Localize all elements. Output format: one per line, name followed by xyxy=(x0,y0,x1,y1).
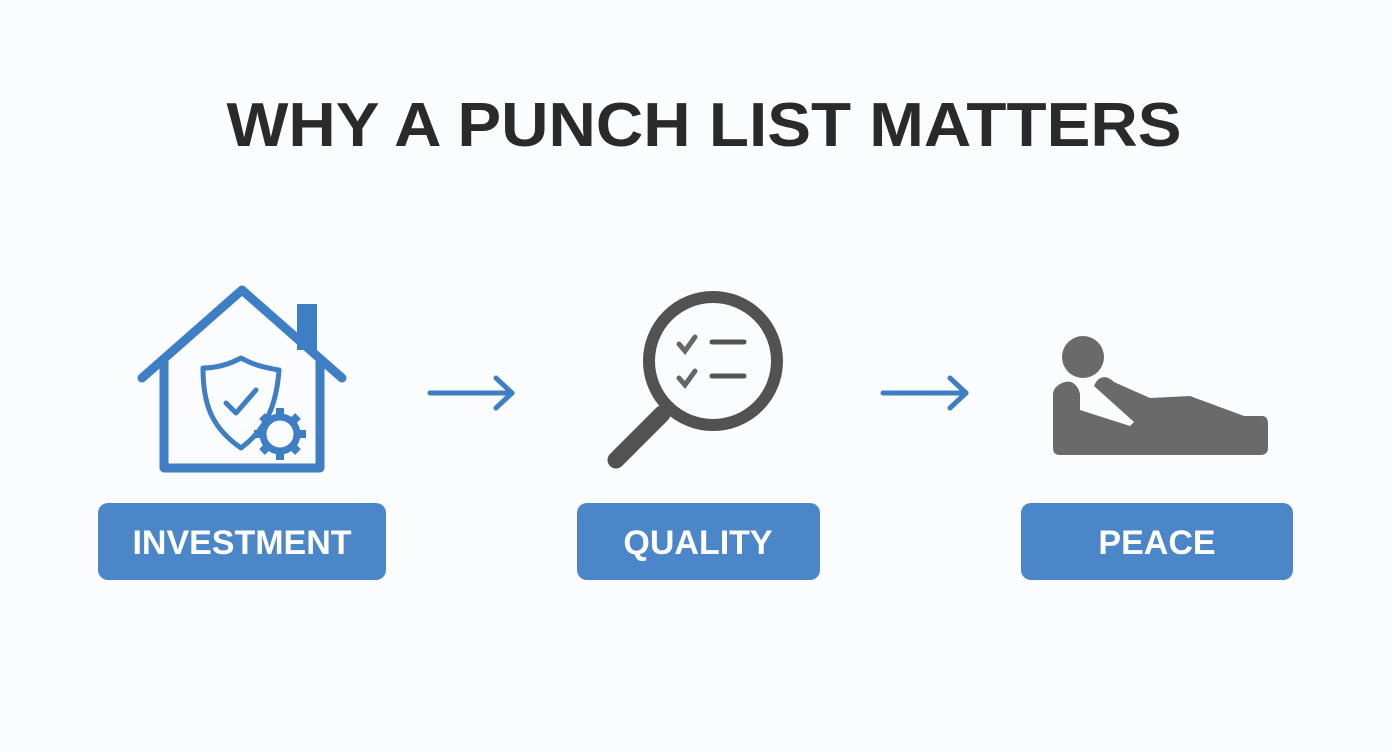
button: QUALITY: QUALITY xyxy=(623,524,773,562)
title: WHY A PUNCH LIST MATTERS xyxy=(226,91,1182,160)
arrow 1 xyxy=(430,378,512,408)
icon: reclining person xyxy=(1053,336,1268,455)
button: INVESTMENT xyxy=(98,503,386,580)
button: PEACE xyxy=(1021,503,1293,580)
button: QUALITY xyxy=(577,503,820,580)
arrow 2 xyxy=(883,378,966,408)
button: INVESTMENT: INVESTMENT xyxy=(132,524,352,562)
icon: magnifying glass with checklist xyxy=(616,297,777,460)
button: PEACE: PEACE xyxy=(1098,524,1216,562)
icon: house with shield and gear xyxy=(142,290,342,468)
